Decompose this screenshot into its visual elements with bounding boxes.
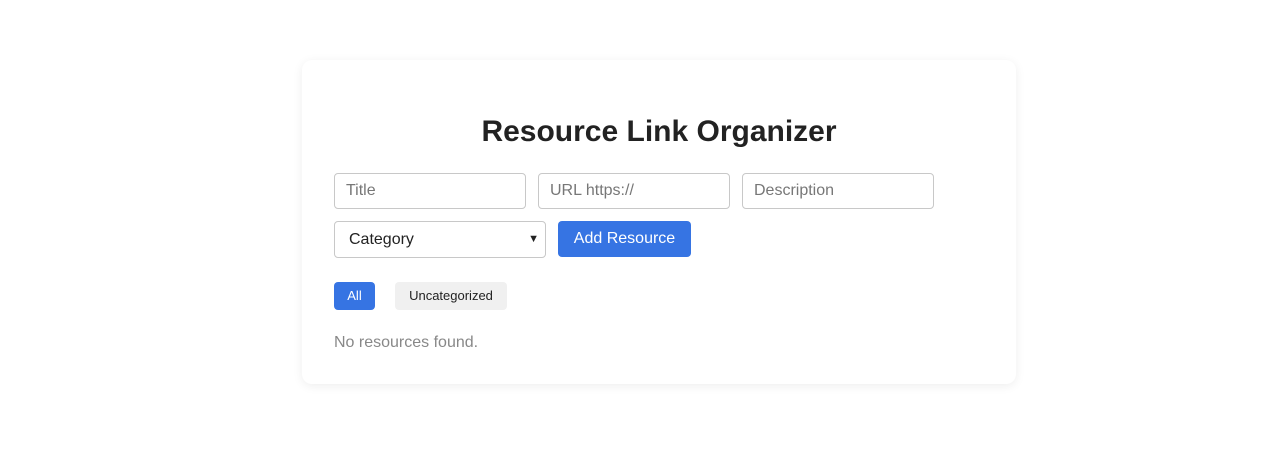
input: title: Title: [346, 182, 376, 199]
input: description: [742, 173, 934, 209]
button: add resource: Add Resource: [574, 230, 675, 247]
select: category: [334, 221, 546, 258]
input: url: URL https://: [550, 182, 634, 199]
filter: all: All: [347, 288, 362, 303]
select: category: ▼: [528, 233, 539, 245]
button: add resource: [558, 221, 691, 257]
input: description: Description: [754, 182, 834, 199]
input: title: [334, 173, 526, 209]
filter: uncategorized: [395, 282, 507, 310]
panel: organizer card: [302, 60, 1016, 384]
input: url: [538, 173, 730, 209]
select: category: Category: [349, 231, 414, 248]
filter: uncategorized: Uncategorized: [409, 288, 493, 303]
title: Resource Link Organizer: [481, 115, 837, 148]
empty state text: No resources found.: [334, 334, 478, 351]
filter: all: [334, 282, 375, 310]
